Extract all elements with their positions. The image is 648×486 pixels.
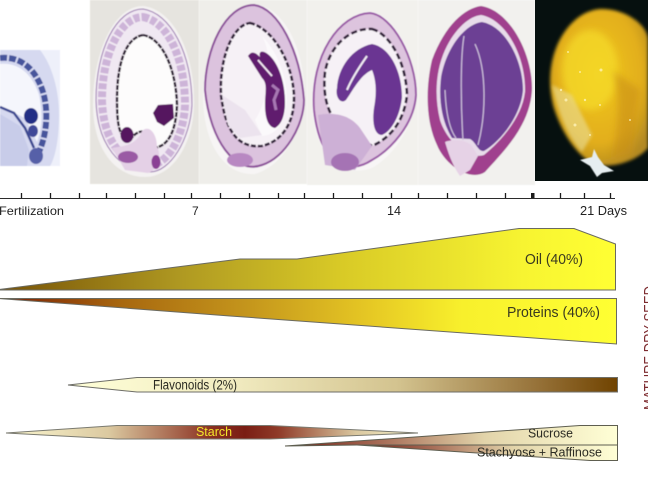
photo: early embryo seed section — [90, 0, 199, 184]
band: proteins — [0, 298, 616, 344]
band: flavonoids: Flavonoids (2%) — [153, 378, 237, 392]
axis label: Fertilization: Fertilization — [0, 204, 64, 218]
photo: mature yellow seed — [535, 0, 648, 181]
band: starch: Starch — [196, 424, 232, 439]
axis label: 21 Days: 21 Days — [580, 204, 627, 218]
photo: seed at fertilization — [0, 50, 60, 166]
axis label: 14: 14 — [387, 204, 401, 218]
axis label: 7: 7 — [192, 204, 199, 218]
band: stachyose and raffinose — [357, 444, 618, 460]
photo: bent cotyledon seed section — [307, 0, 418, 185]
band: oil — [0, 228, 616, 290]
band: oil: Oil (40%) — [525, 252, 583, 268]
photo: mature embryo seed section — [418, 0, 535, 185]
band: stachyose and raffinose: Stachyose + Raffinose — [477, 444, 602, 460]
timeline axis — [0, 193, 615, 198]
band: flavonoids — [68, 378, 618, 392]
band: sucrose — [285, 426, 618, 446]
band: sucrose: Sucrose — [528, 426, 573, 440]
band: proteins: Proteins (40%) — [507, 305, 600, 321]
band: starch — [6, 424, 418, 439]
photo: torpedo embryo seed section — [199, 0, 307, 184]
